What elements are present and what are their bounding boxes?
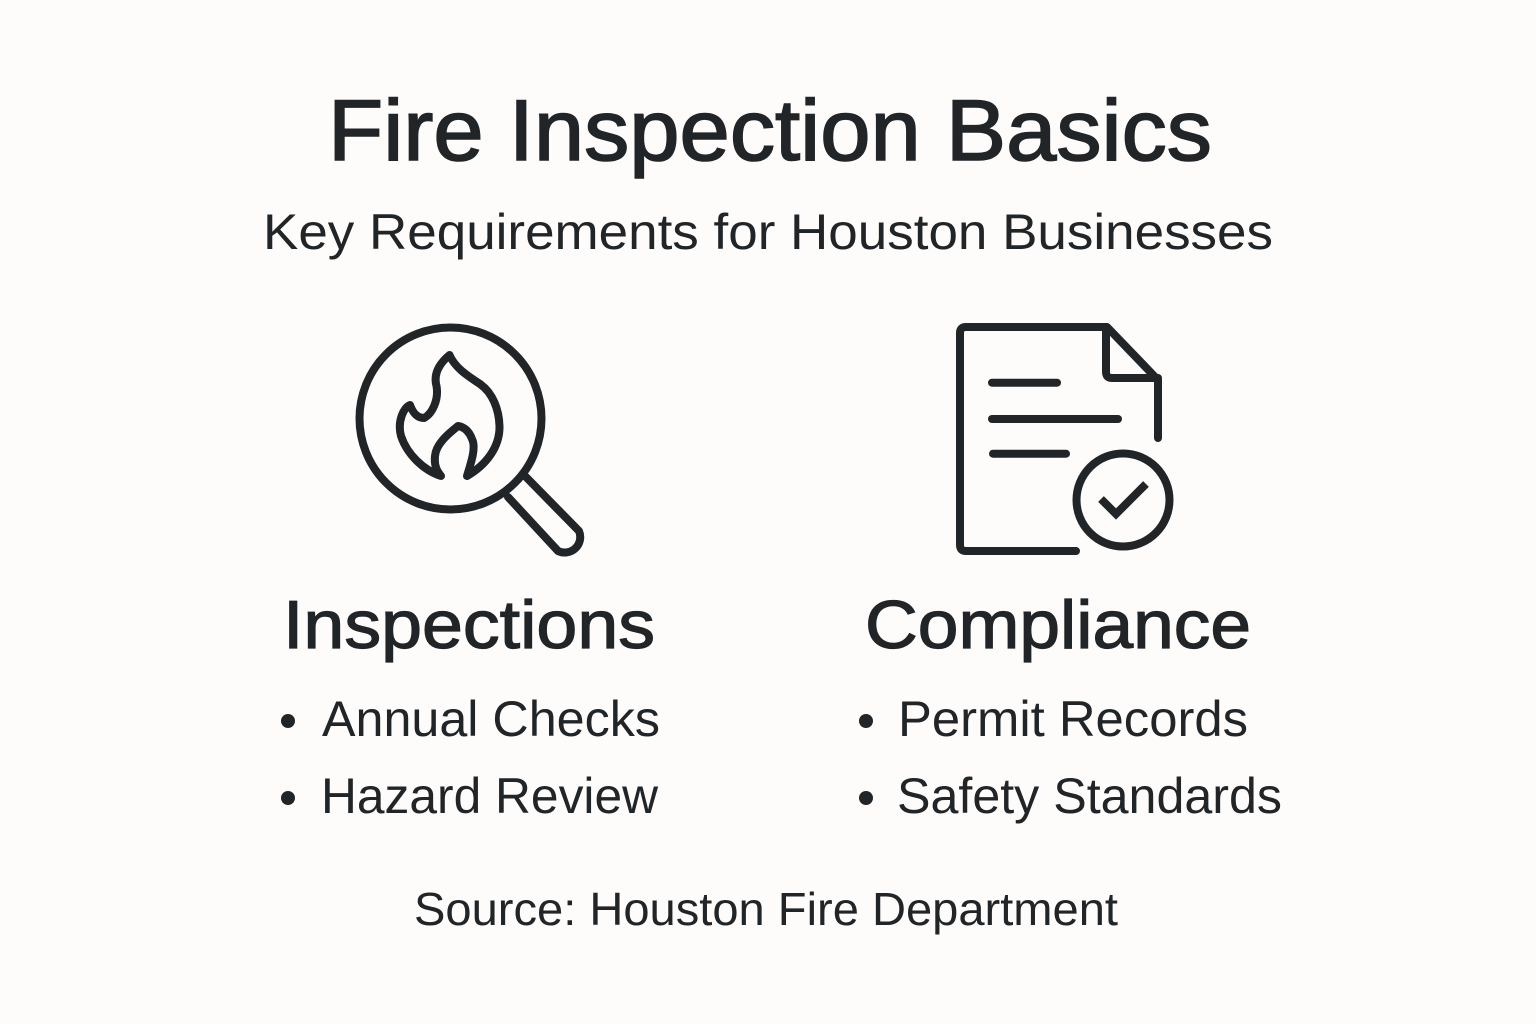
heading: inspections: Inspections bbox=[283, 587, 655, 663]
heading: compliance: Compliance bbox=[865, 587, 1251, 663]
list: compliance items: Safety Standards bbox=[897, 768, 1282, 824]
list: inspections items bbox=[281, 691, 660, 824]
panel: compliance bbox=[859, 327, 1282, 824]
list: inspections items: Hazard Review bbox=[321, 768, 659, 824]
panel: inspections bbox=[281, 328, 660, 824]
title: Fire Inspection Basics bbox=[328, 83, 1212, 179]
list: compliance items: Permit Records bbox=[898, 691, 1248, 747]
source note: Source: Houston Fire Department bbox=[414, 883, 1118, 935]
list: compliance items bbox=[859, 691, 1282, 824]
icon: magnifying glass with flame bbox=[360, 328, 580, 553]
subtitle: Key Requirements for Houston Businesses bbox=[263, 204, 1273, 260]
list: inspections items: Annual Checks bbox=[322, 691, 660, 747]
icon: document with check mark bbox=[960, 327, 1170, 551]
